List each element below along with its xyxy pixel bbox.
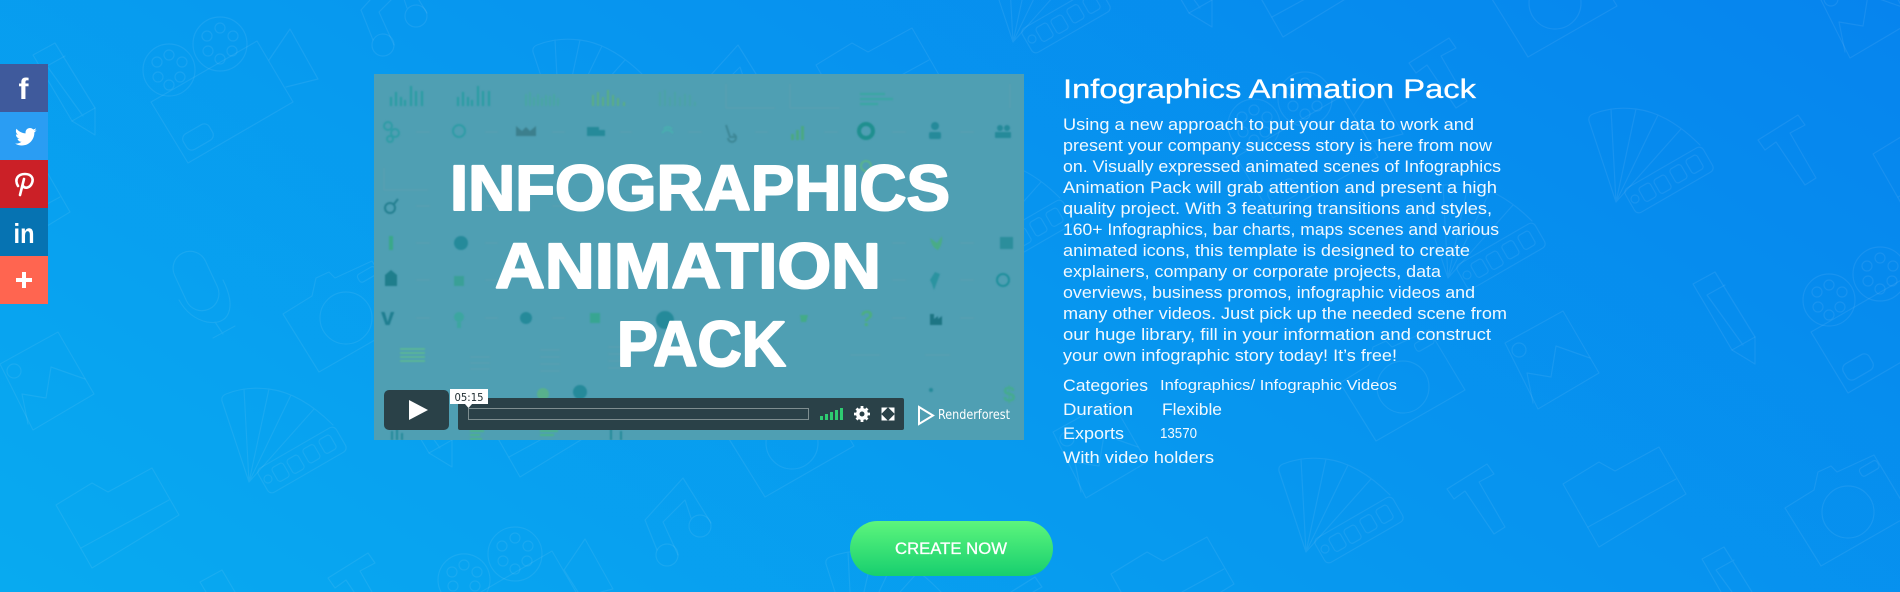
description paragraph: on. Visually expressed animated scenes of Infographics [1063,158,1501,176]
icon: settings gear [854,406,870,422]
thumbnail title text: INFOGRAPHICS [450,152,950,224]
thumbnail title text: ANIMATION [495,230,881,302]
description paragraph: Animation Pack will grab attention and present a high [1063,179,1497,197]
description paragraph [1063,116,1507,365]
video thumbnail background [374,74,1024,440]
play button [384,390,449,430]
thumbnail title text: PACK [617,308,786,380]
social share sidebar [0,64,48,304]
template metadata: Categories [1063,377,1148,395]
icon: linkedin [0,208,48,256]
call to action button [850,521,1053,576]
description paragraph: Using a new approach to put your data to work and [1063,116,1474,134]
description paragraph: explainers, company or corporate projects, data [1063,263,1442,281]
description paragraph: your own infographic story today! It’s free! [1063,347,1397,365]
icon: twitter [0,112,48,160]
time tooltip [450,389,488,408]
description paragraph: present your company success story is here from now [1063,137,1492,155]
thumbnail grid of infographic icons [381,84,1015,440]
renderforest logo: Renderforest [938,408,1010,423]
description paragraph: animated icons, this template is designed to create [1063,242,1470,260]
icon: more share [0,256,48,304]
description paragraph: quality project. With 3 featuring transitions and styles, [1063,200,1492,218]
thumbnail grid of infographic icons: ? [860,306,873,331]
thumbnail title text [450,152,950,380]
icon: pinterest [0,160,48,208]
control bar [458,398,904,430]
icon: facebook: f [18,73,30,106]
template metadata: Exports [1063,425,1124,443]
description paragraph: 160+ Infographics, bar charts, maps scenes and various [1063,221,1499,239]
heading: Infographics Animation Pack [1063,74,1477,104]
template metadata: Duration [1063,401,1133,419]
thumbnail grid of infographic icons: v [381,304,395,331]
template metadata [1063,377,1397,467]
template metadata: With video holders [1063,449,1214,467]
thumbnail grid of infographic icons: $ [1003,382,1015,407]
template metadata: Flexible [1162,401,1222,419]
description paragraph: overviews, business promos, infographic videos and [1063,284,1475,302]
icon: fullscreen [882,408,894,420]
renderforest logo [919,407,1010,424]
call to action button: CREATE NOW [895,540,1007,558]
icon: linkedin: in [14,218,34,249]
icon: signal bars [820,408,843,420]
template metadata: Infographics/ Infographic Videos [1160,378,1397,394]
panel: video player [374,74,1024,440]
icon: facebook [0,64,48,112]
template metadata: 13570 [1160,426,1197,442]
description paragraph: our huge library, fill in your information and construct [1063,326,1492,344]
description paragraph: many other videos. Just pick up the needed scene from [1063,305,1507,323]
time tooltip: 05:15 [454,391,484,404]
